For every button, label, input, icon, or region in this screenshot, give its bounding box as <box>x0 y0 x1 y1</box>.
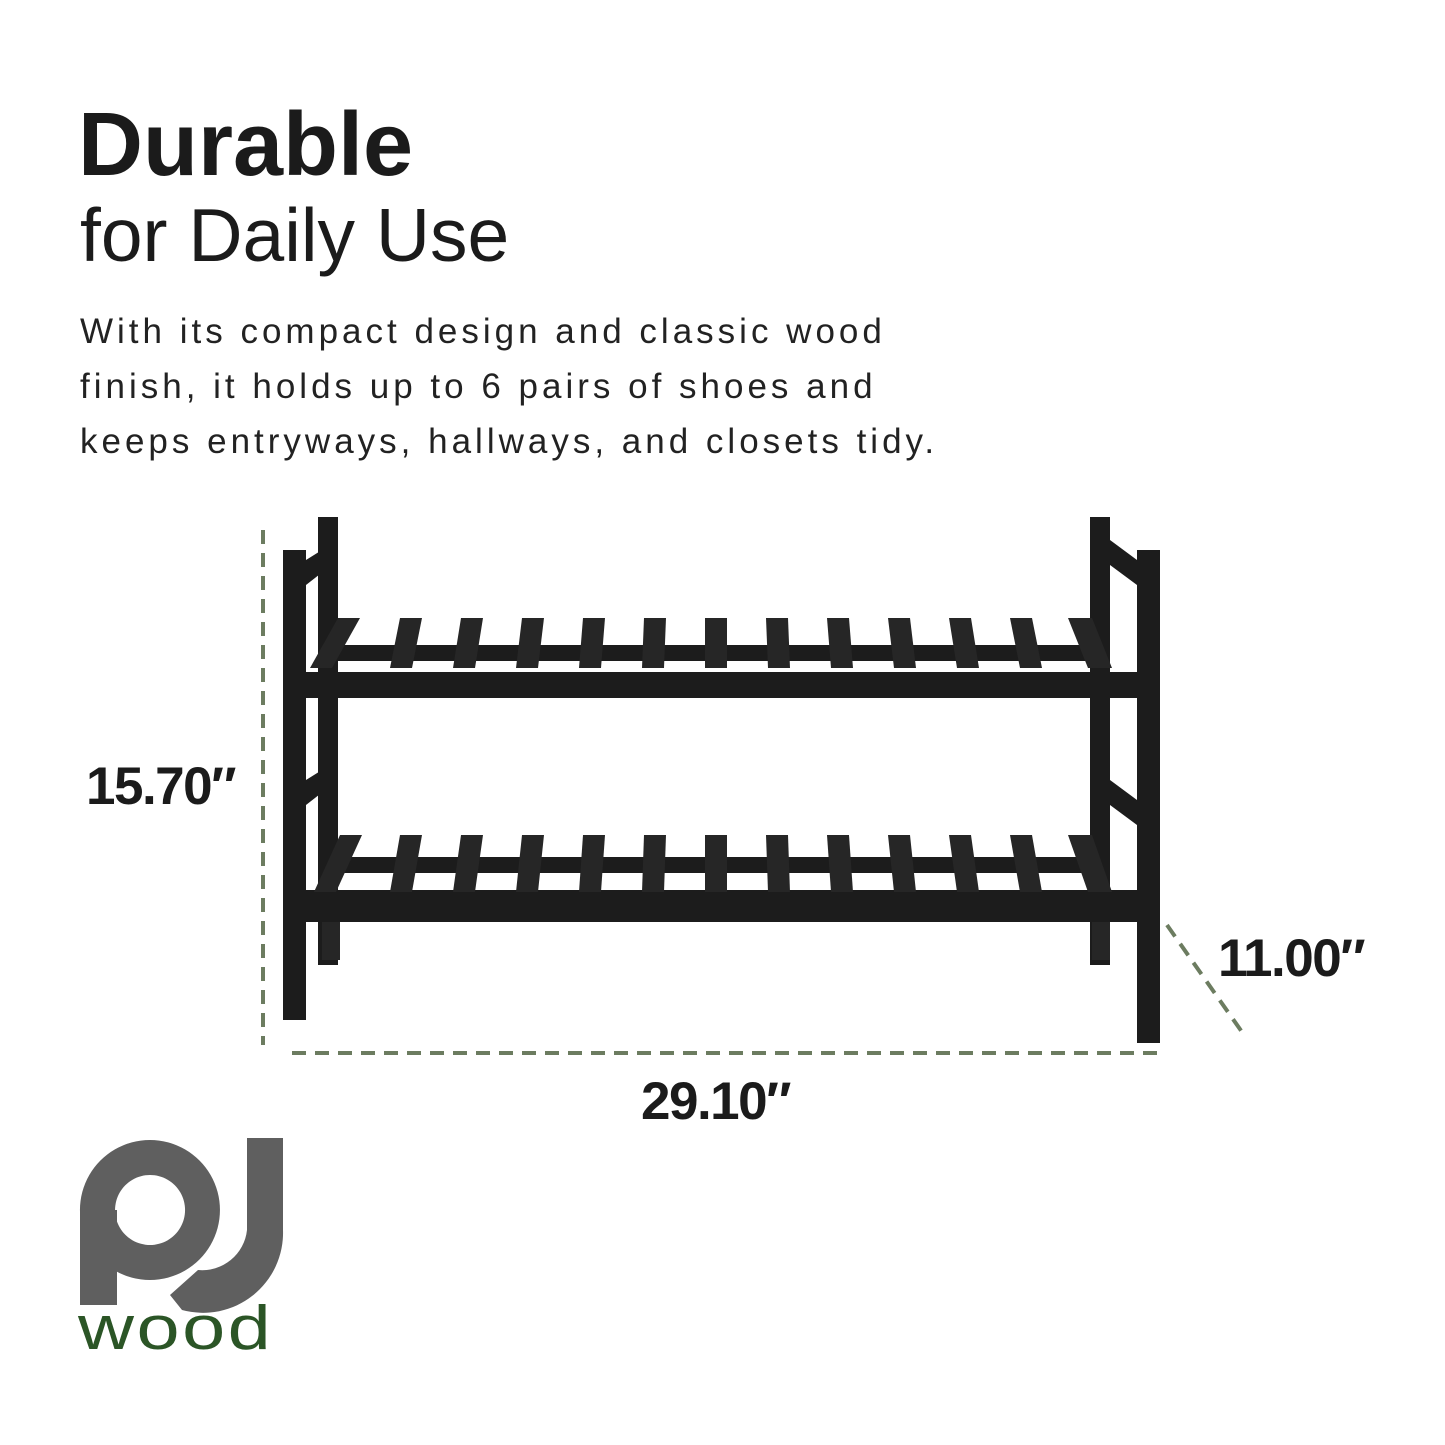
dimension lines <box>263 530 1242 1053</box>
logo: pj <box>80 1138 284 1313</box>
label: width: 29.10″ <box>641 1072 790 1131</box>
body text: keeps entryways, hallways, and closets tidy. <box>80 422 938 461</box>
logo <box>78 1138 284 1363</box>
subtitle: for Daily Use <box>80 193 509 277</box>
body text: finish, it holds up to 6 pairs of shoes and <box>80 367 877 406</box>
label: depth: 11.00″ <box>1218 929 1364 988</box>
body text <box>80 312 938 461</box>
label: height: 15.70″ <box>86 757 235 816</box>
rack <box>283 517 1160 1043</box>
body text: With its compact design and classic wood <box>80 312 886 351</box>
title: Durable <box>78 95 413 195</box>
logo: wood: wood <box>78 1294 273 1363</box>
